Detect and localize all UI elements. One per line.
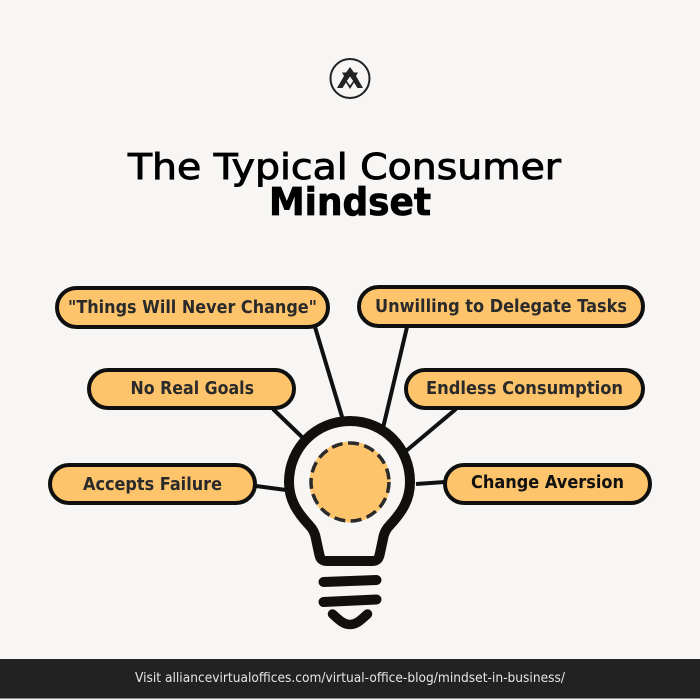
pill: Endless Consumption xyxy=(406,370,643,408)
pill: Change Aversion xyxy=(445,465,650,503)
footer bar xyxy=(0,659,700,698)
pill: No Real Goals: No Real Goals xyxy=(130,379,254,399)
bulb outline xyxy=(289,421,410,561)
pill: Accepts Failure: Accepts Failure xyxy=(83,475,222,495)
title: The Typical Consumer xyxy=(127,147,561,188)
pill: Unwilling to Delegate Tasks xyxy=(359,287,643,326)
dashed ring xyxy=(311,443,389,521)
logo xyxy=(330,59,370,98)
pill: Things Will Never Change xyxy=(57,288,328,327)
pill: Change Aversion: Change Aversion xyxy=(471,473,624,493)
pill: Endless Consumption: Endless Consumption xyxy=(426,379,623,399)
bulb base xyxy=(324,580,376,624)
pill: Accepts Failure xyxy=(50,465,255,503)
title xyxy=(127,147,561,224)
bulb centre circle xyxy=(310,442,390,522)
pill: Unwilling to Delegate Tasks: Unwilling to Delegate Tasks xyxy=(375,297,627,317)
icon: light bulb xyxy=(289,421,410,624)
footer bar: Visit alliancevirtualoffices.com/virtual-office-blog/mindset-in-business/ xyxy=(135,671,566,686)
pill: No Real Goals xyxy=(89,370,294,408)
title: Mindset xyxy=(269,180,431,224)
connector lines xyxy=(256,327,456,490)
pill: Things Will Never Change: "Things Will Never Change" xyxy=(68,298,317,318)
